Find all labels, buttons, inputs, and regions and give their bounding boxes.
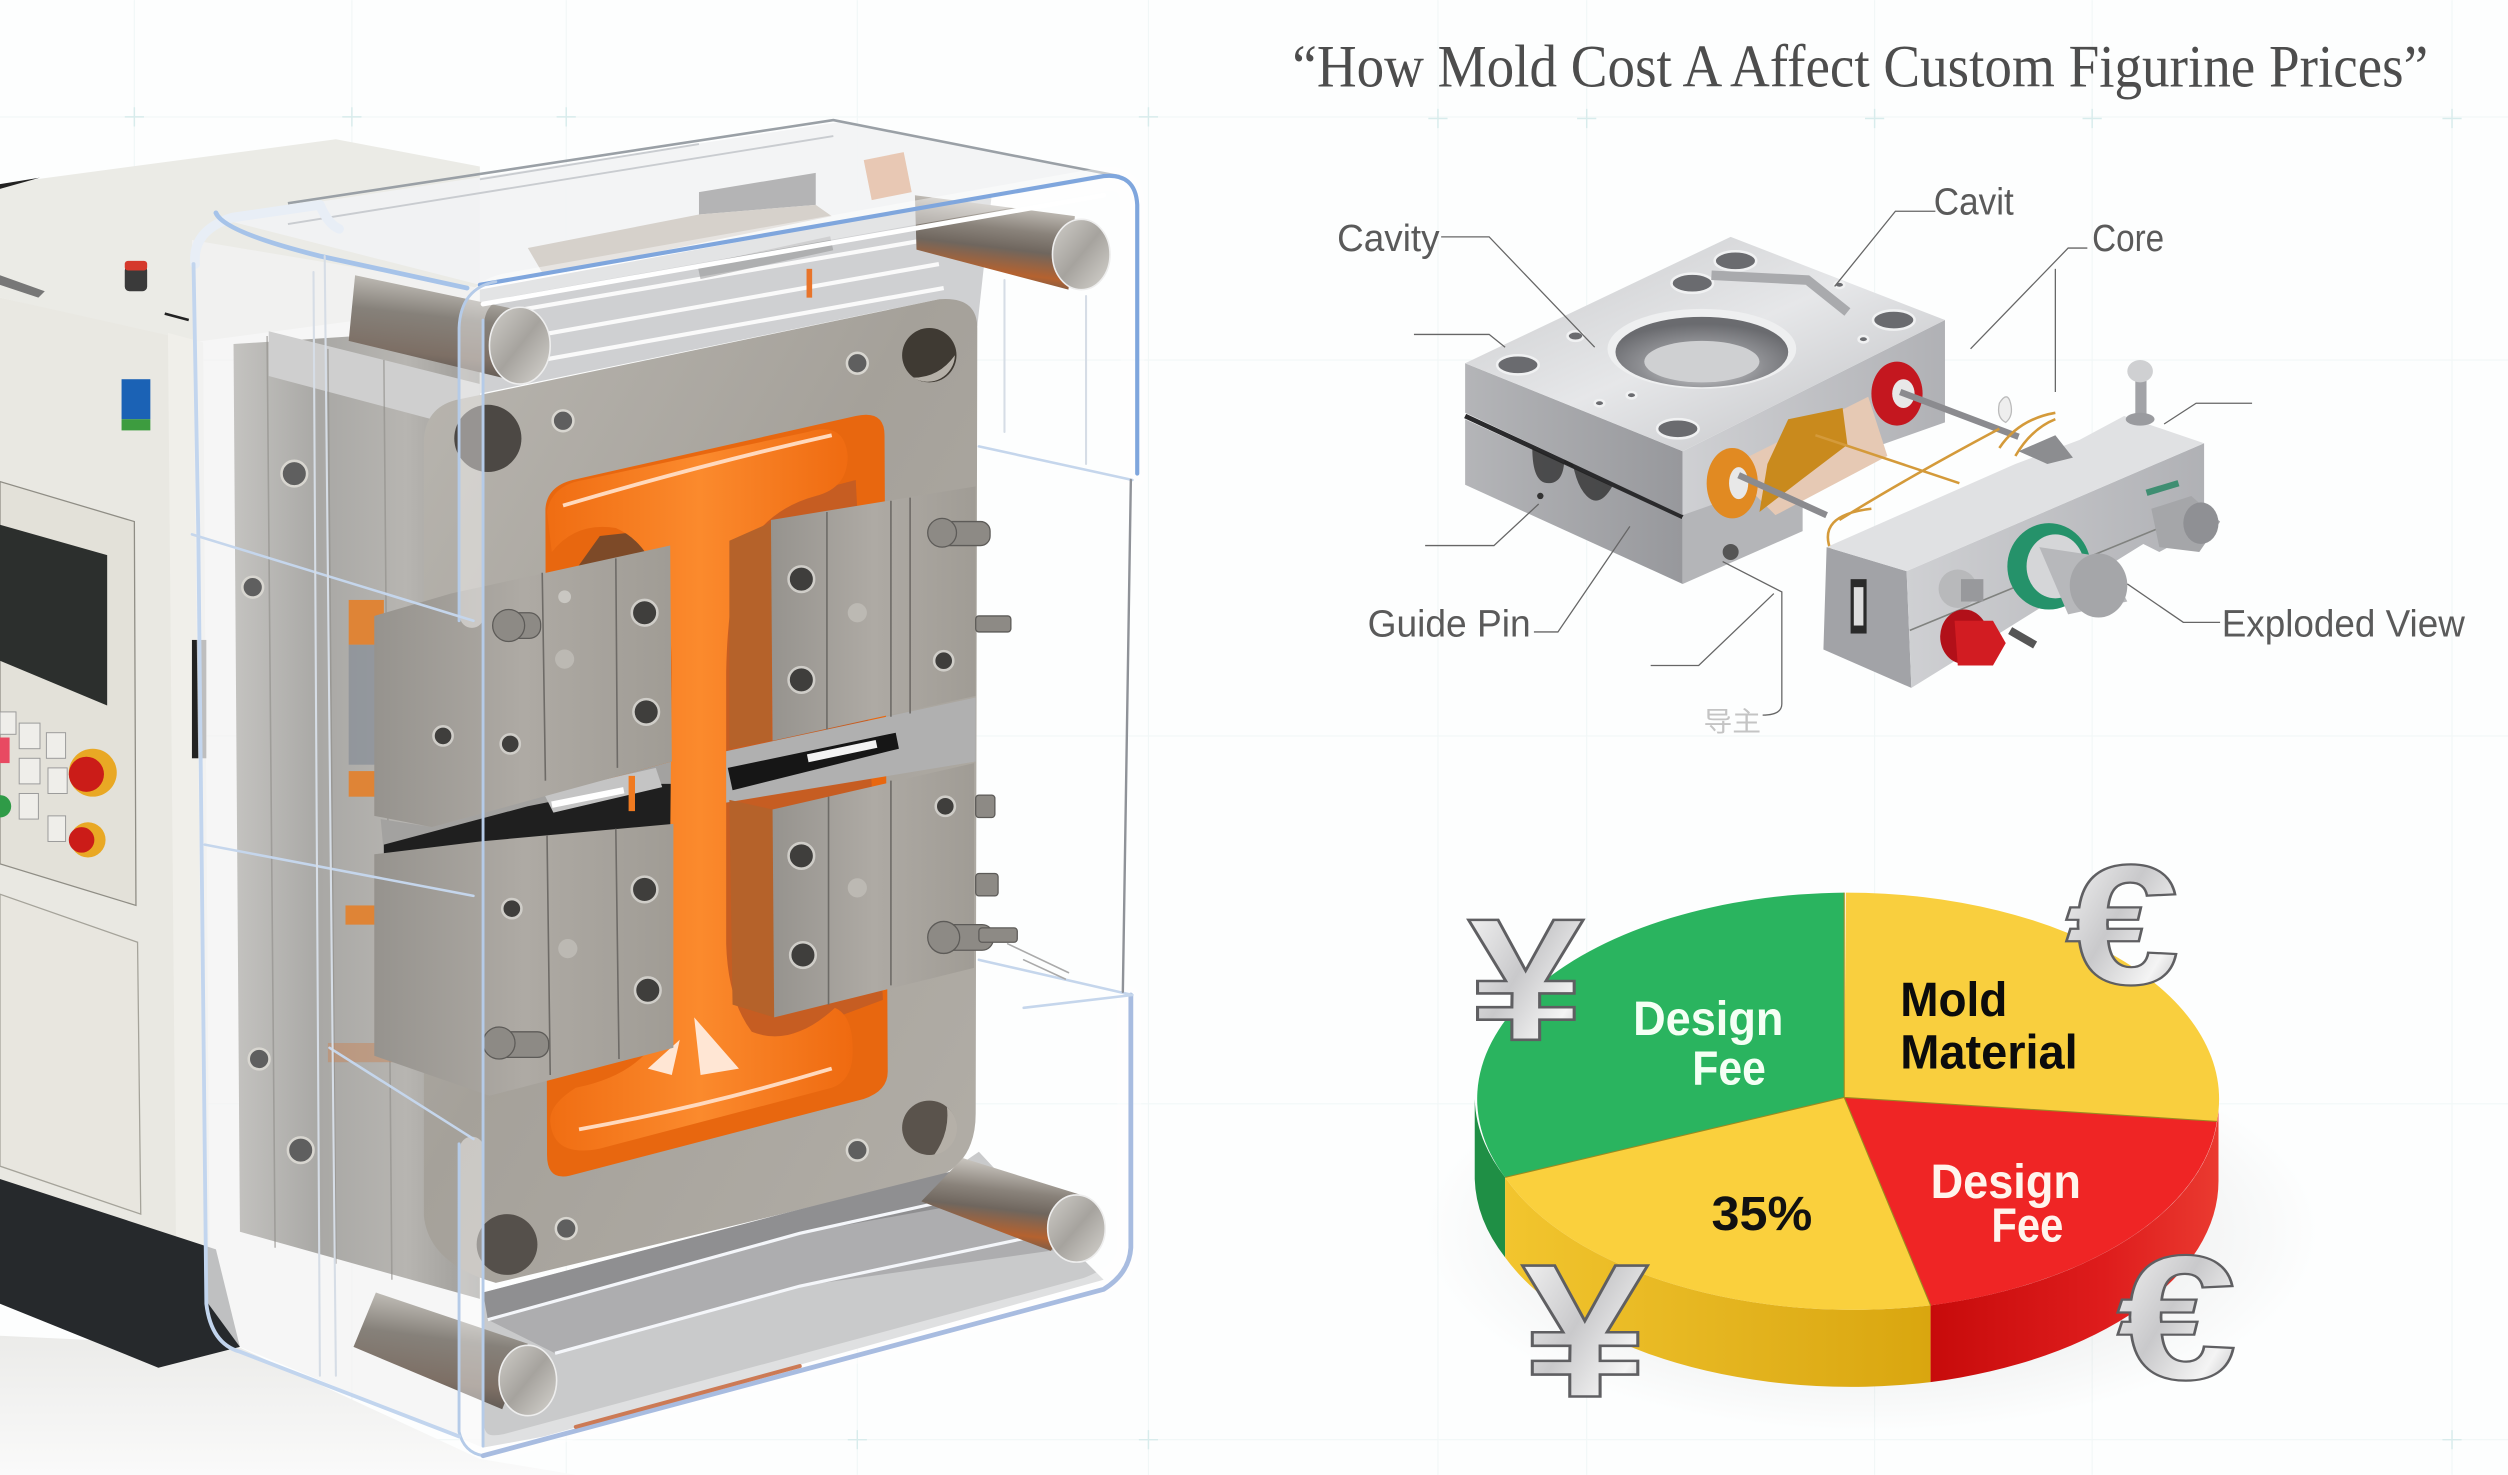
pie label: Design Fee red: Fee: [1991, 1199, 2063, 1252]
small clear part: [1999, 397, 2011, 422]
housing acrylic frame: [192, 176, 1137, 1456]
machine top button: [125, 261, 147, 291]
plate mounting holes: [242, 328, 957, 1275]
slice: red design fee: [1844, 1097, 2217, 1305]
steel block lower left: [374, 824, 673, 1096]
pie label: Mold Material: Material: [1900, 1027, 2078, 1080]
machine top surface: [0, 139, 480, 342]
pie label: Design Fee green: [1633, 993, 1783, 1096]
rod top right: [915, 195, 1110, 290]
housing floor reflection: [483, 1152, 1104, 1448]
label: Core: Core: [2092, 217, 2164, 260]
top housing face: [216, 122, 1120, 285]
pie label: 35%: 35%: [1711, 1188, 1812, 1241]
pie label: Mold Material: Mold: [1900, 974, 2007, 1027]
acrylic left tint over machine: [192, 240, 483, 1448]
machine control panel: [0, 482, 136, 905]
label: Exploded View: Exploded View: [2222, 603, 2465, 646]
label: Cavity: Cavity: [1337, 217, 1440, 260]
pie label: Mold Material: [1900, 974, 2078, 1080]
mold bolt holes: [1497, 251, 1915, 438]
rod bottom left: [353, 1293, 557, 1416]
slice: yellow mold material: [1844, 893, 2219, 1121]
steel block upper right: [729, 486, 976, 749]
machine logo badge: [122, 379, 150, 430]
icon: silver yen bottom: ¥: [1522, 1224, 1649, 1437]
red ring upper: [1871, 362, 1923, 426]
label: Guide Pin: Guide Pin: [1368, 603, 1531, 646]
rod top left end cap: [489, 307, 550, 384]
guide rods and wires: [1739, 392, 2055, 552]
pie label: Design Fee green: Design: [1633, 993, 1783, 1046]
upper mold block faces: [1465, 237, 1945, 515]
main steel plate: [424, 299, 977, 1283]
icon: silver yen top left: ¥: [1468, 882, 1584, 1077]
orange block: [1759, 408, 1847, 512]
orange I-shaped plastic runner: [547, 429, 853, 1150]
slice: yellow 35%: [1505, 1097, 1931, 1310]
pie label: Design Fee red: Design: [1931, 1156, 2081, 1209]
steel block upper left: [374, 546, 672, 827]
pie side walls: [1475, 1099, 2218, 1387]
orange ring: [1707, 448, 1758, 518]
cost pie chart: [1424, 830, 2319, 1437]
machine body: [0, 139, 480, 1368]
title: “How Mold Cost A Affect Custom Figurine Prices”: [1292, 34, 2428, 101]
label: Cavit: Cavit: [1934, 180, 2014, 223]
dark orange inner block backing: [672, 480, 883, 1056]
cavity bowl: [1607, 309, 1796, 389]
lower mold block: [1465, 416, 1803, 584]
black parting strip left: [381, 761, 672, 854]
silver connector: [1939, 570, 1983, 608]
machine front face: [0, 298, 210, 1249]
machine base: [0, 1179, 240, 1368]
machine lower door: [0, 894, 141, 1214]
orange cavity recess: [545, 415, 888, 1177]
top vertical pin: [2126, 360, 2155, 426]
rear steel plates: [234, 328, 480, 1299]
ejector pins: [483, 518, 1017, 1059]
slice: green design fee: [1477, 893, 1844, 1177]
rear hex bolt: [2147, 483, 2220, 552]
label: faded guide text: 导主: [1703, 706, 1761, 737]
rod top left: [349, 275, 536, 381]
silver interior band above plate: [480, 195, 992, 394]
leader lines: [1414, 211, 2252, 715]
right mold block: [1823, 416, 2204, 688]
green ring and cylinder: [2007, 523, 2127, 618]
pie shadow: [1424, 1032, 2319, 1432]
steel block lower right: [729, 763, 974, 1017]
rod bottom right: [921, 1158, 1105, 1262]
transparent mold housing with steel mold: [192, 120, 1137, 1456]
icon: silver euro bottom: €: [2117, 1218, 2237, 1417]
exploded mold diagram: [1337, 180, 2465, 737]
pie label: Design Fee green: Fee: [1692, 1043, 1766, 1096]
red bolt: [1940, 610, 2037, 666]
icon: silver euro top right: €: [2065, 830, 2180, 1021]
black parting strip right: [723, 698, 976, 803]
slice dividers: [1505, 893, 2217, 1305]
pie label: Design Fee red: [1931, 1156, 2081, 1252]
